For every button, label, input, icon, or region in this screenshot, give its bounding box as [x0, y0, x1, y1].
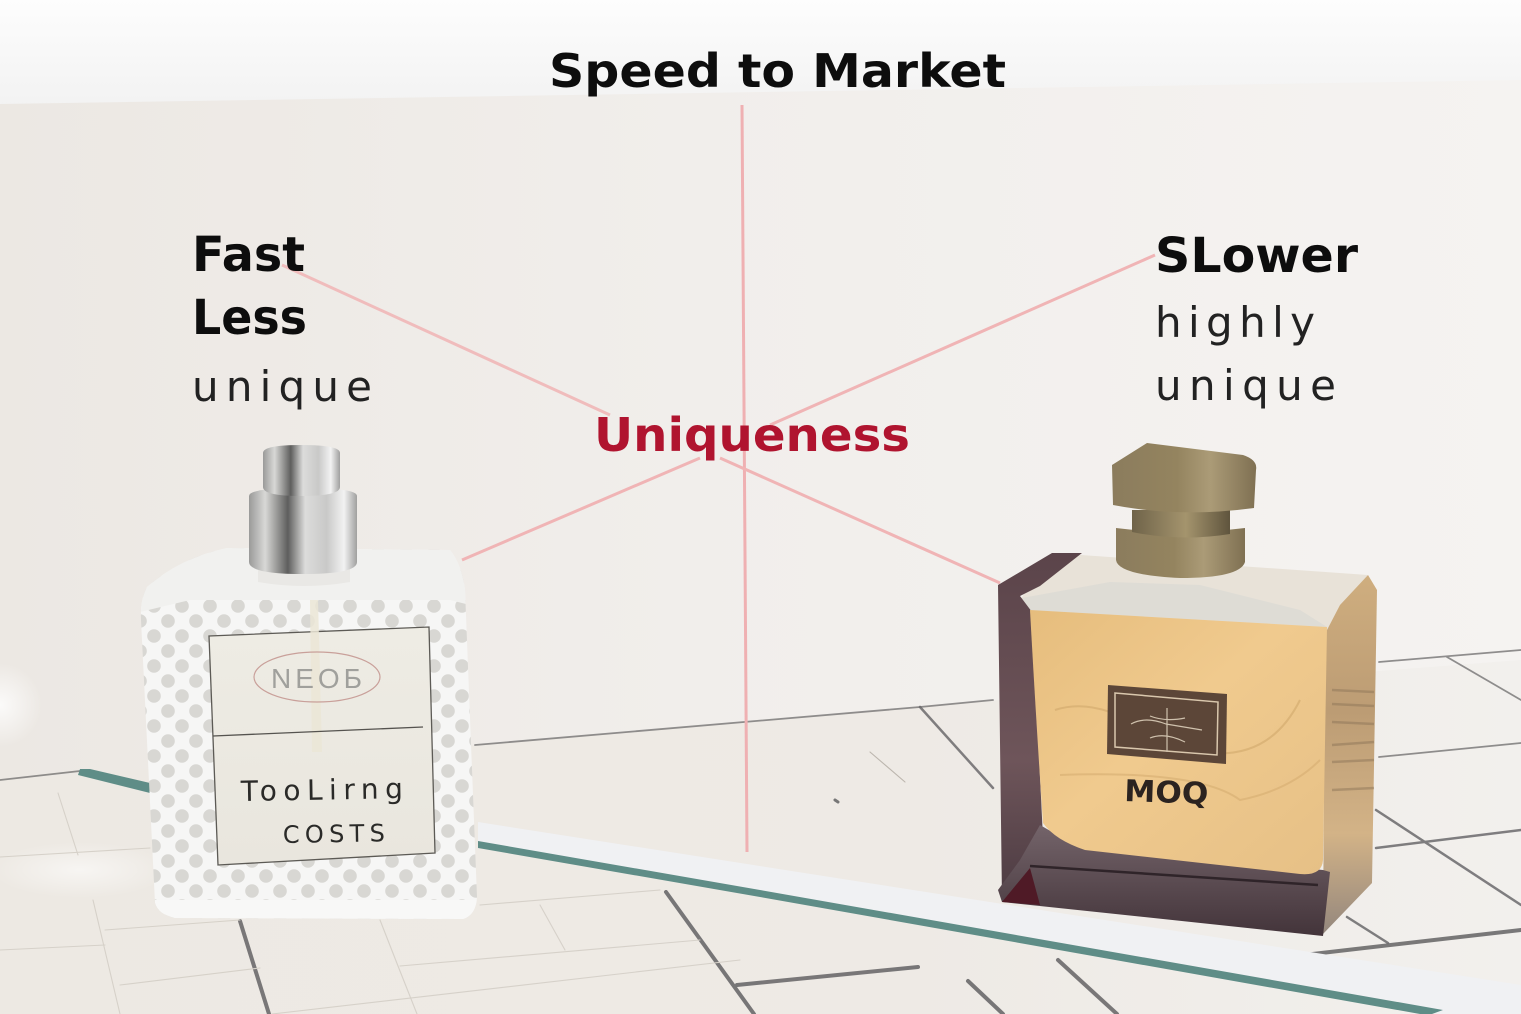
diagonal red line: bottom right — [720, 458, 1000, 583]
bronze collar ring — [1116, 528, 1245, 578]
dark base — [998, 825, 1330, 936]
center label: Uniqueness: Uniqueness — [594, 408, 910, 462]
left text block: Fast Less unique: Fast — [192, 227, 305, 283]
bottle neck — [258, 560, 350, 586]
label text: costs: COSTS — [283, 819, 385, 849]
title: Speed to Market: Speed to Market — [549, 44, 1006, 98]
silver collar — [249, 488, 357, 574]
glass sheet edge — [78, 769, 1521, 1014]
right text block: Slower highly unique: highly — [1155, 298, 1315, 347]
left text block: Fast Less unique — [192, 227, 372, 411]
dark left slab — [998, 553, 1082, 900]
right text block: Slower highly unique — [1155, 228, 1358, 410]
emblem plate — [1107, 685, 1227, 764]
silver cap — [263, 445, 340, 496]
bottle: frosted white with silver cap — [130, 445, 490, 930]
bronze neck — [1132, 510, 1230, 538]
side panel — [1323, 575, 1377, 934]
label text: Tooling: TooLirng — [240, 772, 403, 808]
left text block: Fast Less unique: unique — [192, 362, 372, 411]
amber liquid — [1030, 610, 1327, 874]
logo oval — [254, 652, 380, 702]
bottle: amber with bronze cap — [998, 443, 1377, 936]
left text block: Fast Less unique: Less — [192, 290, 307, 346]
floor grid lines — [0, 650, 1521, 1014]
right text block: Slower highly unique: unique — [1155, 361, 1336, 410]
diagonal red line: bottom left — [462, 458, 700, 560]
bronze cap — [1112, 443, 1256, 512]
diagonal red line: top right — [770, 255, 1155, 425]
logo text: NEOБ — [271, 663, 362, 694]
right text block: Slower highly unique: SLower — [1155, 228, 1358, 284]
frosted bottle body — [141, 548, 477, 919]
diagonal red line: top left — [282, 265, 610, 415]
vertical red axis line — [742, 105, 747, 852]
bottle label: MOQ: MOQ — [1124, 774, 1209, 812]
front label — [209, 600, 435, 865]
glass shoulder — [1020, 553, 1368, 630]
